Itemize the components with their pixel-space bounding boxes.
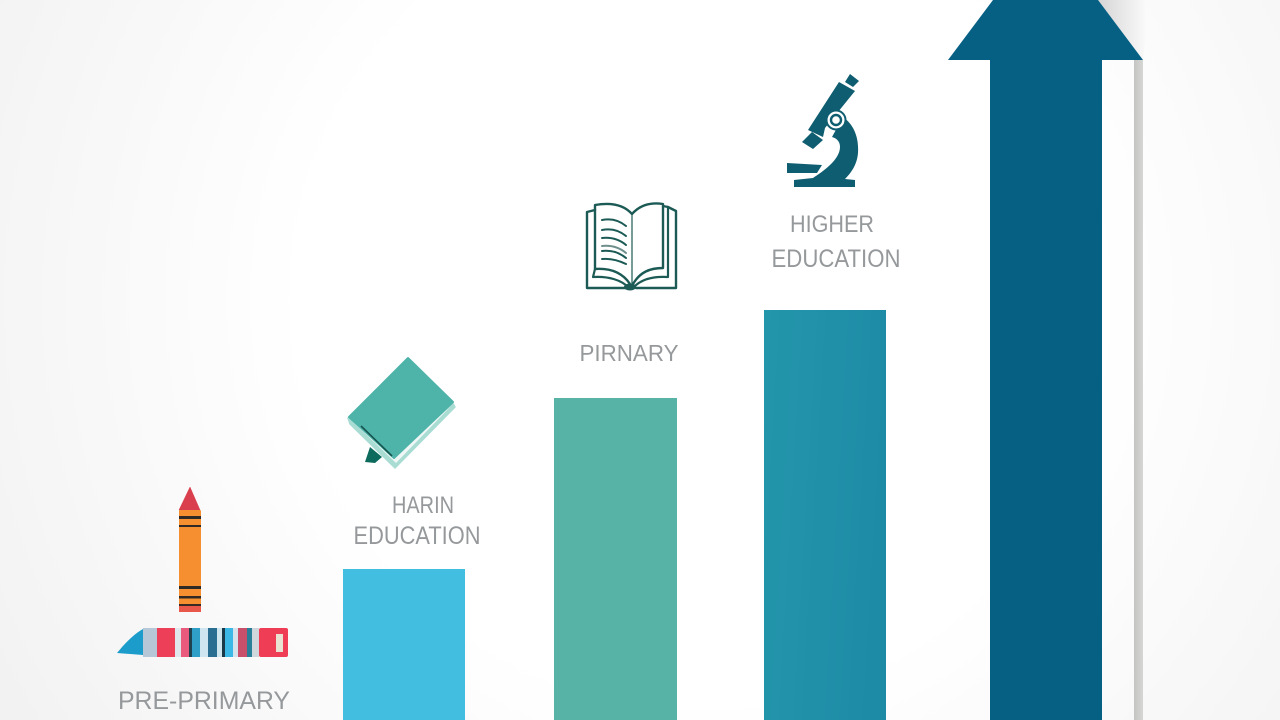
label: pre-primary: PRE-PRIMARY	[118, 687, 290, 715]
growth arrow	[948, 0, 1143, 720]
label: education group	[354, 492, 480, 550]
bar: pre-school education	[343, 569, 465, 720]
arrow shadow	[1097, 0, 1146, 720]
label: education group: HARIN	[392, 492, 454, 519]
label: higher education	[772, 211, 900, 273]
label: primary: PIRNARY	[580, 340, 678, 366]
icon: microscope	[787, 74, 859, 187]
icon: crayons	[117, 487, 288, 657]
label: higher education: EDUCATION	[772, 245, 900, 273]
label: higher education: HIGHER	[790, 211, 874, 238]
icon: closed book	[348, 358, 455, 468]
horizontal striped crayon	[117, 628, 288, 657]
label: education group: EDUCATION	[354, 522, 480, 550]
bar: higher education	[764, 310, 886, 720]
bar: primary	[554, 398, 677, 720]
icon: open book	[587, 203, 676, 290]
vertical orange crayon	[179, 487, 201, 612]
